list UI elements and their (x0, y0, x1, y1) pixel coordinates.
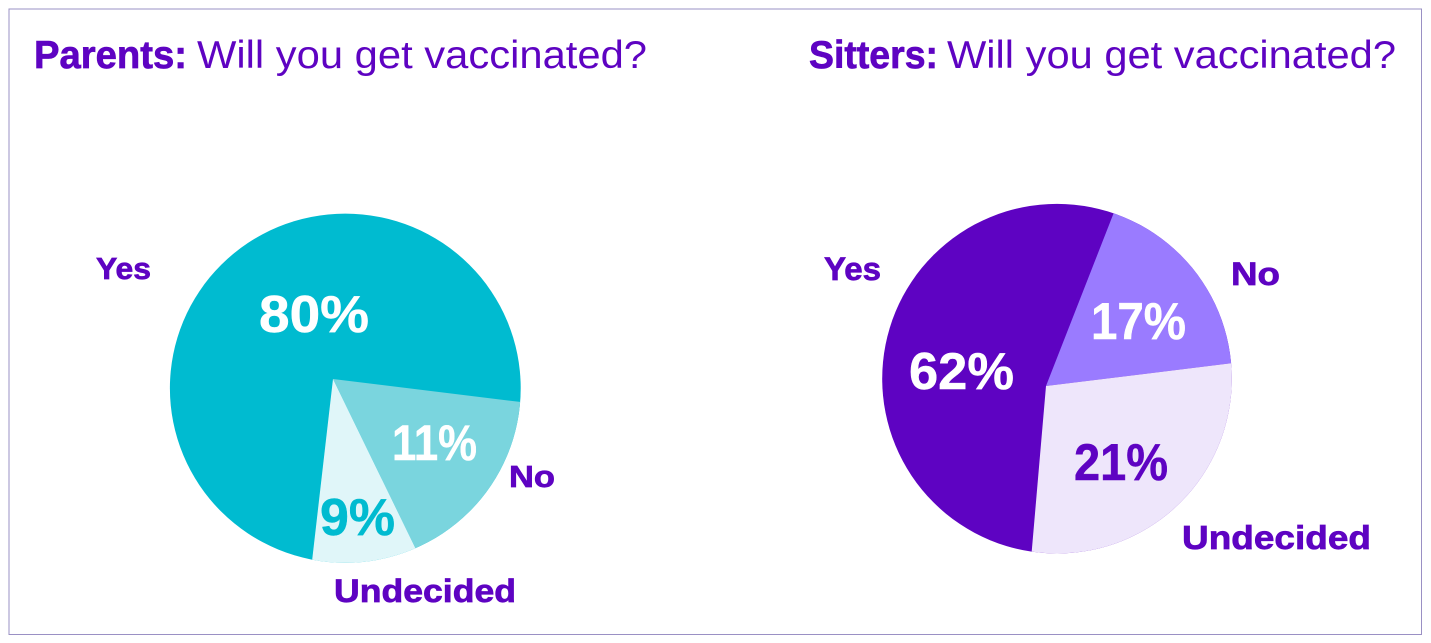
slice: yes 62% (882, 204, 1232, 553)
panel: sitters (810, 39, 1394, 554)
label: yes: Yes (824, 251, 881, 287)
label: undecided: Undecided (334, 573, 516, 609)
label: no: No (509, 459, 555, 494)
value: 9%: 9% (320, 489, 395, 547)
heading: sitters: Sitters: (809, 34, 938, 77)
label: yes: Yes (96, 251, 151, 286)
panel: parents (34, 34, 647, 613)
label: undecided: Undecided (1182, 519, 1371, 556)
slice: no 17% (1046, 213, 1232, 386)
value: 17%: 17% (1091, 293, 1186, 351)
slice: undecided 9% (312, 379, 416, 563)
heading: sitters: Will you get vaccinated? (947, 34, 1396, 77)
slice: undecided 21% (1032, 363, 1232, 554)
heading: parents (34, 34, 647, 77)
pie chart: sitters (882, 204, 1232, 554)
value: 21%: 21% (1074, 434, 1168, 492)
slice: yes 80% (170, 214, 521, 563)
slice: no 11% (333, 379, 520, 548)
value: 80%: 80% (259, 286, 369, 344)
value: 62%: 62% (909, 343, 1014, 401)
value: 11%: 11% (392, 415, 477, 471)
label: no: No (1231, 256, 1280, 292)
heading: parents: Parents: (34, 34, 187, 77)
heading: parents: Will you get vaccinated? (197, 34, 647, 77)
pie chart: parents (170, 214, 521, 563)
